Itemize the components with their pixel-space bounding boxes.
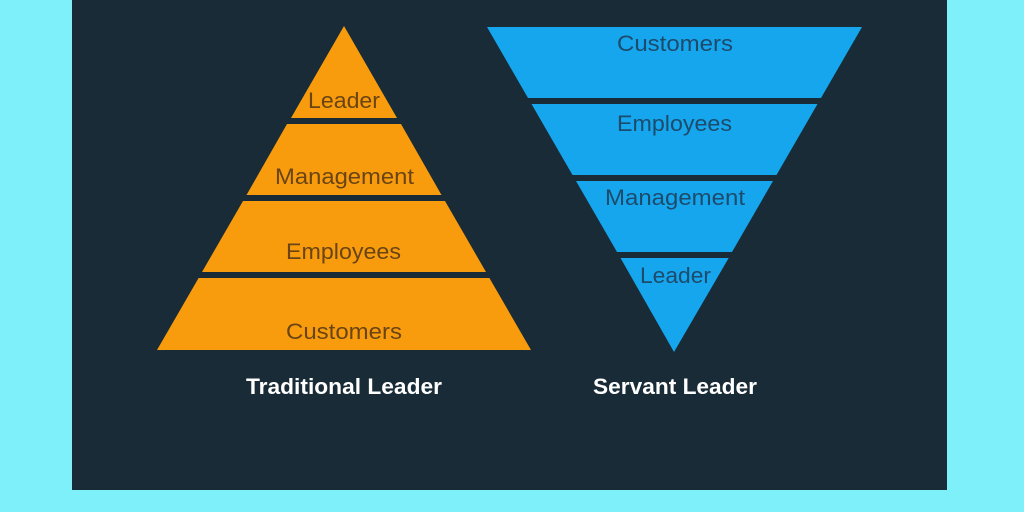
- band: customers: [157, 278, 531, 350]
- band: management: Management: [275, 164, 414, 189]
- band: customers: Customers: [286, 319, 402, 344]
- band: employees: Employees: [617, 111, 732, 136]
- label: servant leader: Servant Leader: [593, 374, 757, 399]
- band: leader: [291, 26, 397, 118]
- band: employees: [202, 201, 486, 272]
- band: customers: [487, 27, 862, 98]
- inverted pyramid: servant leader: [487, 27, 862, 352]
- band: leader: Leader: [308, 88, 380, 113]
- band: leader: Leader: [640, 263, 711, 288]
- band: employees: Employees: [286, 239, 401, 264]
- label: traditional leader: Traditional Leader: [246, 374, 442, 399]
- band: leader: [620, 258, 729, 352]
- band: management: [576, 181, 773, 252]
- band: management: [246, 124, 442, 195]
- band: employees: [532, 104, 818, 175]
- pyramid: traditional leader: [157, 26, 531, 350]
- band: customers: Customers: [617, 31, 733, 56]
- band: management: Management: [605, 185, 745, 210]
